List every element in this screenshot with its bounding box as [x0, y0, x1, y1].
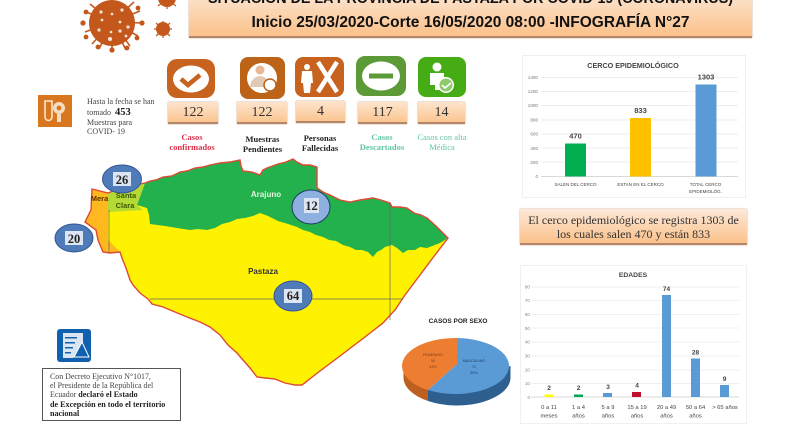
bar values: 4	[635, 382, 639, 390]
category labels: 1 a 4	[572, 405, 586, 411]
category labels: años	[572, 414, 585, 420]
bar values: 2	[547, 385, 551, 392]
bar values	[547, 286, 727, 392]
bar values: 1303	[698, 72, 714, 82]
category labels: 15 a 19	[627, 405, 647, 411]
bar values: 833	[634, 106, 647, 115]
bar values: 74	[663, 286, 670, 293]
icon: small coronavirus	[154, 21, 172, 38]
y axis: 80	[525, 284, 530, 290]
cerco summary callout: los cuales salen 470 y están 833	[557, 226, 710, 240]
value: casos confirmados: 122	[182, 105, 204, 120]
bar values: 28	[692, 350, 699, 356]
value: casos con alta medica: 14	[434, 105, 448, 120]
icon: casos descartados	[356, 56, 406, 96]
decree text box: el Presidente de la República del	[50, 381, 153, 390]
label: femenino: 41%	[429, 365, 437, 369]
y axis: 200	[530, 160, 538, 165]
decree text box: nacional	[50, 409, 79, 418]
bubble: Pastaza 64: 64	[287, 289, 300, 303]
category labels: EPIDEMIOLÓG.	[689, 188, 722, 194]
bubble: Pastaza 64	[274, 281, 312, 311]
category labels: años	[660, 414, 673, 420]
label: Santa Clara: Clara	[116, 201, 135, 210]
label: masculino: 72	[472, 365, 476, 369]
slice: masculino	[428, 338, 509, 394]
label: casos confirmados: Casos confirmados	[169, 132, 215, 152]
category labels: SALEN DEL CERCO	[554, 182, 597, 187]
icon: personas fallecidas	[295, 57, 344, 97]
label: casos con alta medica: Casos con alta Médica	[417, 132, 467, 152]
y axis: 600	[530, 132, 538, 136]
y axis: 70	[525, 298, 530, 303]
chart title: CERCO EPIDEMIOLÓGICO	[587, 61, 679, 70]
y axis: 40	[525, 340, 530, 344]
category labels: > 65 años	[712, 405, 738, 411]
y axis: 1000	[528, 103, 538, 108]
text: samples taken: Muestras para	[87, 118, 132, 126]
icon: test samples	[38, 95, 72, 127]
y axis: 20	[525, 368, 530, 372]
region: Pastaza (yellow)	[85, 159, 448, 385]
bar values: 470	[569, 132, 582, 140]
bubble: Santa Clara 26	[102, 165, 142, 193]
category labels: 50 a 64	[686, 405, 706, 411]
bubble: Santa Clara 26: 26	[116, 173, 128, 187]
y axis: 1200	[528, 89, 538, 94]
category labels: años	[602, 414, 614, 420]
y axis: 400	[530, 146, 538, 151]
y axis	[525, 284, 530, 400]
bar values: 3	[606, 384, 610, 391]
y axis: 0	[535, 174, 538, 179]
value: casos confirmados	[168, 102, 218, 124]
decree text box	[42, 368, 181, 421]
bubble: Mera 20	[55, 224, 93, 252]
bar values	[569, 72, 714, 140]
icon: casos confirmados	[167, 59, 215, 98]
cerco summary callout: El cerco epidemiológico se registra 1303 de	[528, 213, 739, 227]
value: personas fallecidas: 4	[317, 104, 324, 119]
y axis: 60	[525, 312, 530, 317]
label: femenino: 50	[431, 359, 435, 363]
icon: decree checklist	[57, 329, 91, 362]
y axis: 10	[525, 381, 530, 386]
value: casos con alta medica	[418, 102, 465, 124]
label: masculino: 59%	[470, 371, 478, 375]
icon: casos con alta medica	[418, 57, 466, 97]
bubble: Arajuno 12	[292, 190, 330, 224]
y axis: 800	[530, 118, 538, 122]
y axis	[528, 75, 538, 179]
bubble: Mera 20: 20	[68, 232, 80, 246]
bars	[544, 295, 729, 397]
category labels: 0 a 11	[541, 405, 557, 411]
text: samples taken	[87, 97, 155, 136]
y axis: 0	[527, 395, 530, 400]
decree text box: de Excepción en todo el territorio	[50, 400, 165, 409]
label: personas fallecidas: Personas Fallecidas	[302, 133, 338, 152]
label: femenino: FEMENINO	[423, 353, 443, 357]
decree text box: Ecuador declaró el Estado	[50, 390, 138, 399]
label: Mera: Mera	[91, 194, 109, 203]
value: muestras pendientes: 122	[252, 105, 272, 120]
value: casos descartados	[358, 102, 407, 124]
category labels: 20 a 49	[657, 405, 676, 411]
category labels: ESTAN EN EL CERCO	[617, 182, 664, 187]
category labels	[554, 182, 722, 194]
label: Arajuno: Arajuno	[251, 190, 281, 199]
chart title: EDADES	[619, 272, 648, 279]
category labels: años	[689, 414, 702, 420]
y axis: 1400	[528, 75, 538, 80]
label: Pastaza: Pastaza	[248, 267, 278, 276]
slice: femenino	[402, 338, 457, 390]
y axis: 30	[525, 354, 530, 358]
title banner	[189, 0, 752, 38]
bar values: 2	[577, 385, 581, 392]
category labels: años	[631, 414, 643, 420]
value: casos descartados: 117	[372, 105, 393, 120]
cerco summary callout	[520, 209, 747, 245]
category labels: meses	[540, 414, 558, 420]
region: Mera (orange)	[85, 189, 120, 253]
bars	[565, 84, 716, 176]
category labels: 5 a 9	[602, 405, 614, 411]
icon: muestras pendientes	[240, 57, 285, 99]
region: Santa Clara (lime)	[108, 183, 145, 212]
label: Santa Clara: Santa	[116, 191, 137, 200]
icon: small coronavirus top	[158, 0, 176, 9]
pie depth	[403, 366, 428, 401]
value: personas fallecidas	[296, 101, 345, 123]
category labels	[540, 405, 738, 420]
title banner: Inicio 25/03/2020-Corte 16/05/2020 08:00 -INFOGRAFÍA N°27	[251, 14, 690, 30]
bubble: Arajuno 12: 12	[305, 199, 318, 213]
map outline	[85, 159, 448, 385]
text: samples taken: Hasta la fecha se han	[87, 97, 155, 106]
label: muestras pendientes: Muestras Pendientes	[243, 134, 282, 154]
label: masculino: MASCULINO	[463, 359, 485, 363]
text: samples taken: tomado 453	[87, 106, 131, 118]
pie title: CASOS POR SEXO	[429, 318, 487, 325]
bar values: 9	[723, 376, 727, 383]
grid lines	[109, 204, 403, 320]
region: Arajuno (green)	[137, 159, 448, 257]
value: muestras pendientes	[237, 102, 287, 124]
decree text box: Con Decreto Ejecutivo N°1017,	[50, 372, 151, 381]
y axis: 50	[525, 326, 530, 331]
category labels: TOTAL CERCO	[690, 182, 722, 187]
text: samples taken: COVID- 19	[87, 127, 125, 136]
label: casos descartados: Casos Descartados	[360, 132, 404, 152]
